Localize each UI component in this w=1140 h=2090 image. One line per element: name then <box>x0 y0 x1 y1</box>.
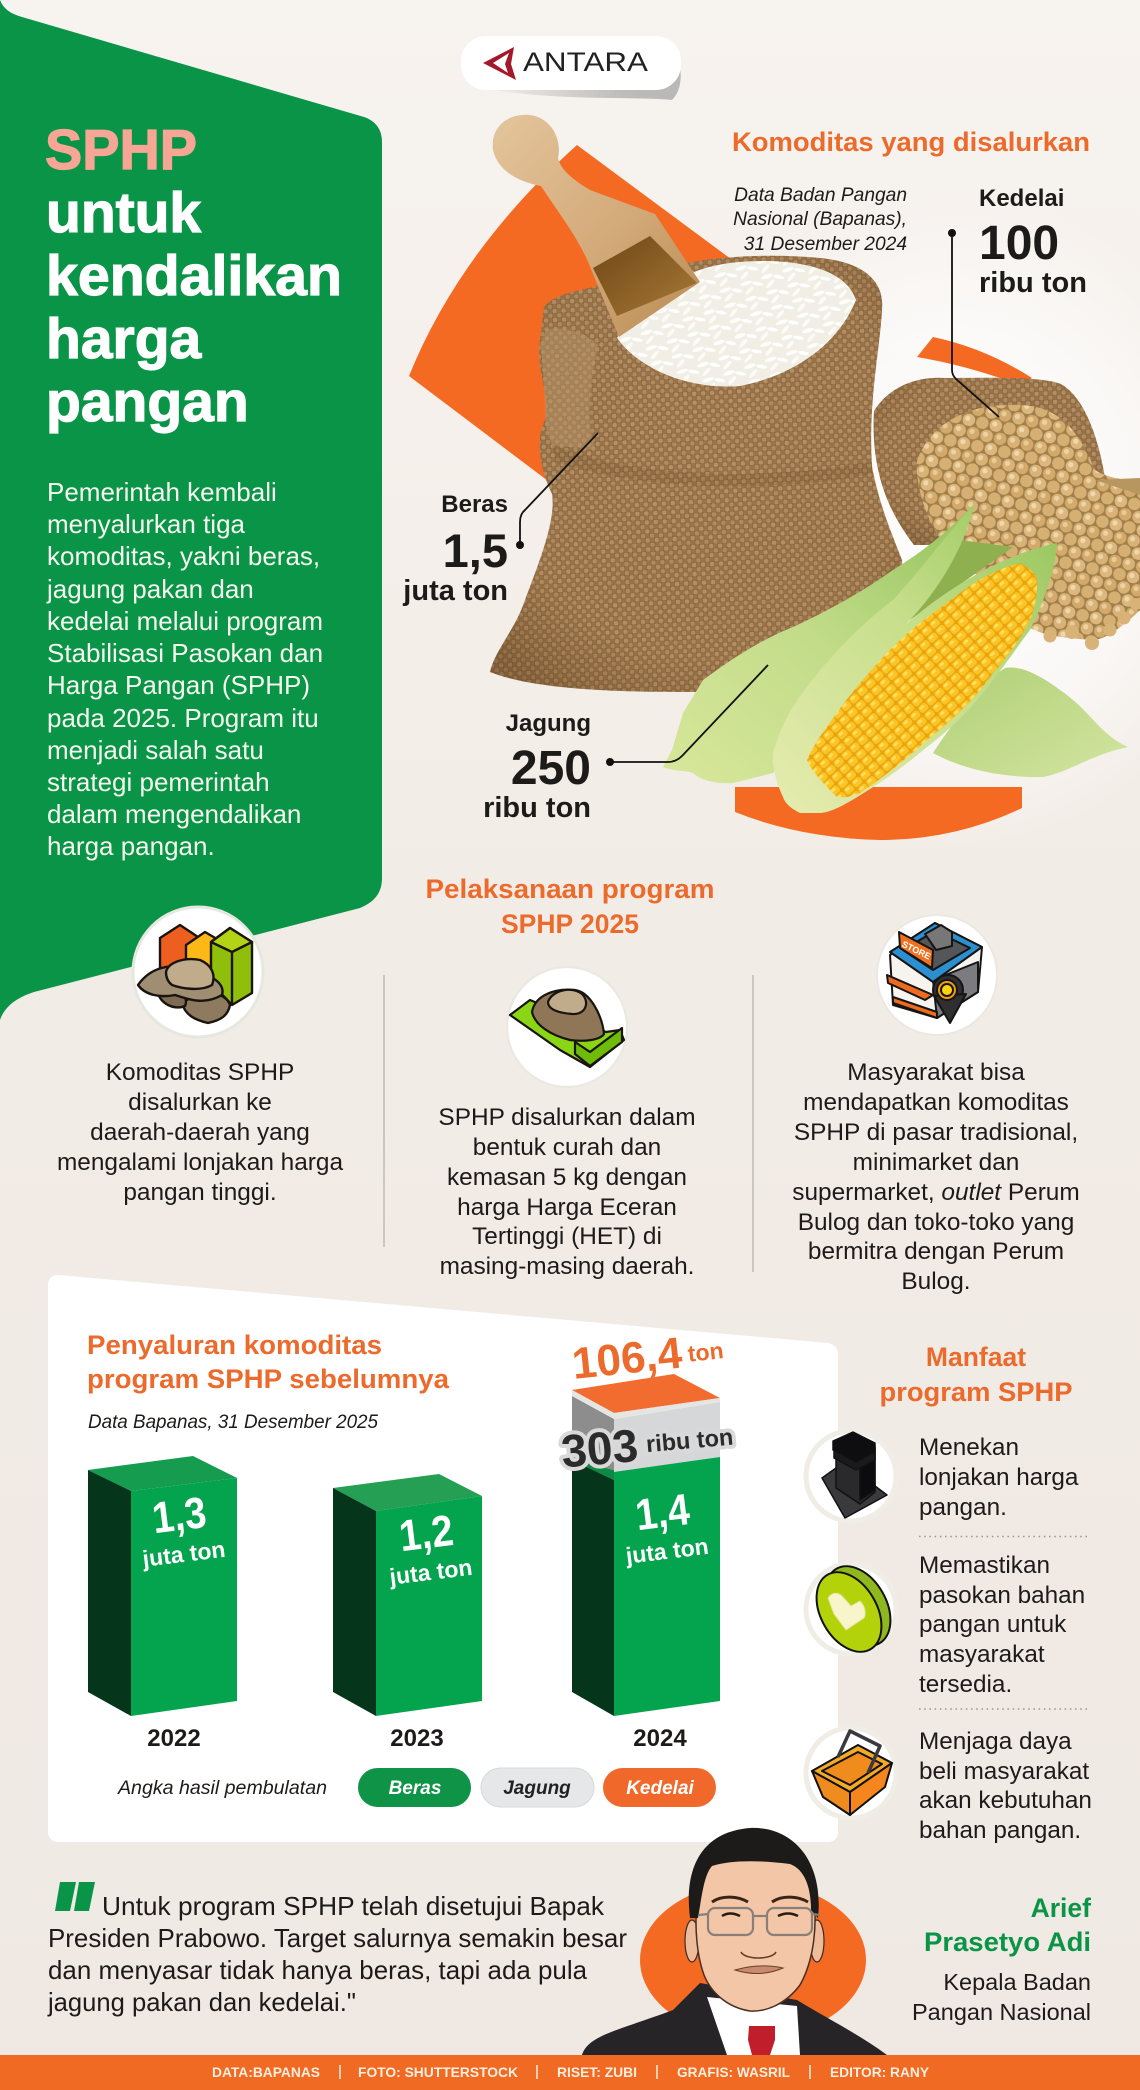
quote mark <box>55 1882 95 1911</box>
quote text: dan menyasar tidak hanya beras, tapi ada pula <box>48 1957 588 1985</box>
callout: beras: juta ton <box>402 575 508 607</box>
bar: 2023: juta ton <box>387 1554 474 1590</box>
source note: Data Badan Pangan <box>734 185 907 206</box>
callout: jagung: ribu ton <box>483 792 591 824</box>
intro paragraph: strategi pemerintah <box>47 767 270 797</box>
column text: kemasan: harga Harga Eceran <box>457 1194 677 1221</box>
source note <box>733 185 907 255</box>
icon: basket <box>806 1728 896 1818</box>
quote text: jagung pakan dan kedelai." <box>47 1989 356 2017</box>
callout: jagung: 250 <box>511 742 591 795</box>
year labels <box>147 1725 687 1752</box>
column text: daerah: disalurkan ke <box>128 1089 272 1116</box>
column text: tempat: bermitra dengan Perum <box>808 1238 1064 1265</box>
title: pangan <box>46 370 249 434</box>
column text: kemasan: Tertinggi (HET) di <box>472 1223 662 1250</box>
title: kendalikan <box>46 244 342 308</box>
label: 303 ribu ton: 303 <box>559 1419 640 1477</box>
portrait <box>582 1828 887 2055</box>
benefit text: lonjakan harga <box>919 1464 1079 1491</box>
legend: Beras <box>389 1778 441 1799</box>
illustration: corn <box>663 503 1128 813</box>
intro paragraph <box>46 477 323 861</box>
footer bar: DATA:BAPANAS <box>212 2065 320 2080</box>
legend: Jagung <box>503 1778 571 1799</box>
orange background shapes <box>409 145 1032 840</box>
benefit text: beli masyarakat <box>919 1758 1089 1785</box>
heading: komoditas: Komoditas yang disalurkan <box>732 127 1090 157</box>
green title panel <box>0 0 382 1020</box>
dividers <box>384 975 753 1272</box>
icon: supply check <box>803 1555 904 1663</box>
bar: 2023 <box>333 1474 482 1716</box>
column text: tempat: Bulog. <box>901 1268 971 1295</box>
intro paragraph: menyalurkan tiga <box>47 509 246 539</box>
column text: tempat: mendapatkan komoditas <box>803 1089 1069 1116</box>
column text: tempat: Bulog dan toko-toko yang <box>798 1209 1074 1236</box>
heading: manfaat: Manfaat <box>926 1342 1026 1372</box>
heading: pelaksanaan: Pelaksanaan program <box>426 874 714 904</box>
legend <box>358 1768 716 1807</box>
rice <box>617 261 856 387</box>
antara logo <box>461 36 681 100</box>
intro paragraph: dalam mengendalikan <box>47 799 301 829</box>
benefit text: masyarakat <box>919 1641 1045 1668</box>
benefit text: Menekan <box>919 1434 1019 1461</box>
label: 106,4 ton: ton <box>686 1337 725 1367</box>
callout: jagung <box>483 665 768 824</box>
bar: 2023: 1,2 <box>396 1506 456 1561</box>
year labels: 2022 <box>147 1725 201 1752</box>
column text: kemasan <box>438 1104 696 1280</box>
speaker role: Pangan Nasional <box>912 1999 1091 2025</box>
column text: kemasan: masing-masing daerah. <box>440 1253 694 1280</box>
source note: 31 Desember 2024 <box>744 234 907 255</box>
source note: Nasional (Bapanas), <box>733 209 907 230</box>
footer bar: RISET: ZUBI <box>557 2065 637 2080</box>
column text: daerah <box>57 1059 343 1206</box>
speaker name <box>924 1893 1091 1957</box>
chart heading: program SPHP sebelumnya <box>87 1364 449 1394</box>
footer bar <box>0 2055 1140 2090</box>
column text: tempat: supermarket, outlet Perum <box>792 1179 1080 1206</box>
bar: 2022: 1,3 <box>149 1488 209 1543</box>
column text: kemasan: kemasan 5 kg dengan <box>447 1164 687 1191</box>
icon: sacks and bars <box>133 907 263 1037</box>
label: 106,4 ton: 106,4 <box>570 1329 685 1389</box>
legend: Kedelai <box>626 1778 695 1799</box>
callout: beras: 1,5 <box>443 524 508 577</box>
year labels: 2024 <box>633 1725 687 1752</box>
footer bar: EDITOR: RANY <box>830 2065 929 2080</box>
chart source: Data Bapanas, 31 Desember 2025 <box>88 1412 378 1433</box>
heading: manfaat: program SPHP <box>880 1377 1072 1407</box>
title <box>45 118 342 434</box>
title: untuk <box>46 181 201 245</box>
intro paragraph: kedelai melalui program <box>47 606 323 636</box>
benefit text: pangan. <box>919 1494 1007 1521</box>
illustration: soybeans in sack <box>874 378 1140 650</box>
column text: daerah: pangan tinggi. <box>123 1179 277 1206</box>
speaker name: Prasetyo Adi <box>924 1927 1091 1957</box>
intro paragraph: komoditas, yakni beras, <box>47 541 320 571</box>
bar: 2024 stacked <box>572 1374 720 1716</box>
icon: price pressure <box>806 1431 896 1521</box>
panel: bar chart card <box>48 1275 838 1842</box>
chart heading: Penyaluran komoditas <box>87 1330 382 1360</box>
label: 303 ribu ton: ribu ton <box>645 1424 734 1457</box>
quote text: Presiden Prabowo. Target salurnya semakin besar <box>48 1925 627 1953</box>
icon: store: STORE <box>900 939 932 962</box>
benefit text: akan kebutuhan <box>919 1787 1092 1814</box>
heading: pelaksanaan: SPHP 2025 <box>501 909 639 939</box>
footer bar: GRAFIS: WASRIL <box>677 2065 790 2080</box>
title: harga <box>46 307 203 371</box>
bar: 2022 <box>88 1456 237 1716</box>
column text: tempat: SPHP di pasar tradisional, <box>794 1119 1078 1146</box>
intro paragraph: Stabilisasi Pasokan dan <box>47 638 323 668</box>
label: 303 ribu ton <box>559 1411 735 1477</box>
callout: kedelai <box>948 185 1087 417</box>
callout: beras <box>402 433 598 607</box>
callout: kedelai: Kedelai <box>979 185 1064 212</box>
benefit text <box>919 1434 1092 1844</box>
column text: tempat <box>792 1059 1080 1295</box>
column text: tempat: minimarket dan <box>853 1149 1019 1176</box>
year labels: 2023 <box>390 1725 444 1752</box>
intro paragraph: Pemerintah kembali <box>47 477 277 507</box>
callout: jagung: Jagung <box>506 710 591 737</box>
intro paragraph: harga pangan. <box>47 831 215 861</box>
title: SPHP <box>45 118 197 182</box>
quote text <box>47 1893 627 2017</box>
heading: manfaat <box>880 1342 1072 1407</box>
column text: tempat: Masyarakat bisa <box>847 1059 1025 1086</box>
column text: daerah: mengalami lonjakan harga <box>57 1149 343 1176</box>
column text: kemasan: SPHP disalurkan dalam <box>438 1104 696 1131</box>
label: 106,4 ton <box>570 1324 726 1389</box>
scoop <box>493 115 700 337</box>
footer bar: FOTO: SHUTTERSTOCK <box>358 2065 518 2080</box>
benefit text: tersedia. <box>919 1671 1012 1698</box>
intro paragraph: menjadi salah satu <box>47 735 264 765</box>
antara logo: ANTARA <box>523 47 648 77</box>
bar: 2024 stacked: 1,4 <box>633 1485 693 1540</box>
bar: 2024 stacked: juta ton <box>623 1533 710 1569</box>
callout: kedelai: 100 <box>979 217 1059 270</box>
intro paragraph: pada 2025. Program itu <box>47 703 319 733</box>
benefit text: Memastikan <box>919 1552 1050 1579</box>
quote text: Untuk program SPHP telah disetujui Bapak <box>102 1893 604 1921</box>
benefit text: pasokan bahan <box>919 1582 1085 1609</box>
callout: kedelai: ribu ton <box>979 267 1087 299</box>
column text: daerah: daerah-daerah yang <box>90 1119 310 1146</box>
icon: packaged sacks <box>507 967 627 1087</box>
speaker role <box>912 1969 1091 2025</box>
legend note: Angka hasil pembulatan <box>117 1777 327 1799</box>
intro paragraph: jagung pakan dan <box>46 574 254 604</box>
callout: beras: Beras <box>441 491 508 518</box>
column text: kemasan: bentuk curah dan <box>473 1134 661 1161</box>
intro paragraph: Harga Pangan (SPHP) <box>47 670 310 700</box>
illustration: rice sack <box>490 115 905 692</box>
chart heading <box>87 1330 449 1394</box>
benefit text: Menjaga daya <box>919 1728 1072 1755</box>
bar: 2022: juta ton <box>140 1536 227 1572</box>
icon: store <box>877 915 997 1035</box>
benefit text: pangan untuk <box>919 1611 1067 1638</box>
heading: pelaksanaan <box>426 874 714 939</box>
speaker name: Arief <box>1031 1893 1091 1923</box>
speaker role: Kepala Badan <box>943 1969 1091 1995</box>
benefit text: bahan pangan. <box>919 1817 1081 1844</box>
column text: daerah: Komoditas SPHP <box>106 1059 294 1086</box>
